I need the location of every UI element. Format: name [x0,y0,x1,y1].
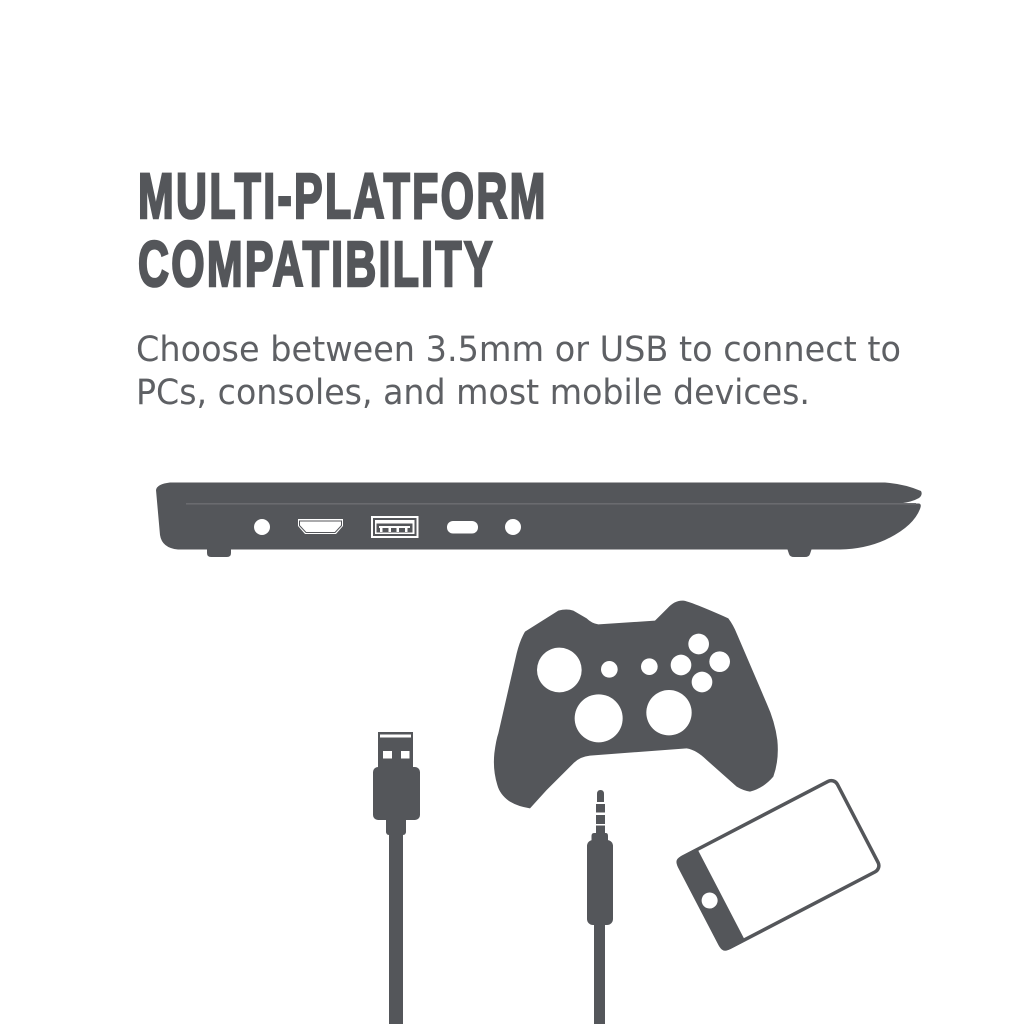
body text: PCs, consoles, and most mobile devices. [136,373,810,413]
title: MULTI-PLATFORM [138,160,545,232]
icon: laptop side view [156,482,922,557]
body text: Choose between 3.5mm or USB to connect to [136,330,901,370]
port: USB-A [371,516,418,538]
title [138,160,545,300]
icon: game controller [494,601,778,808]
port: power [505,519,521,535]
title: COMPATIBILITY [138,228,492,300]
port: USB-C [447,521,478,534]
body text [136,330,901,413]
port: HDMI [298,519,343,534]
icon: USB cable [373,732,420,1024]
port: audio jack [254,519,270,535]
icon: 3.5mm audio cable [587,790,613,1024]
icon: smartphone [674,777,882,953]
